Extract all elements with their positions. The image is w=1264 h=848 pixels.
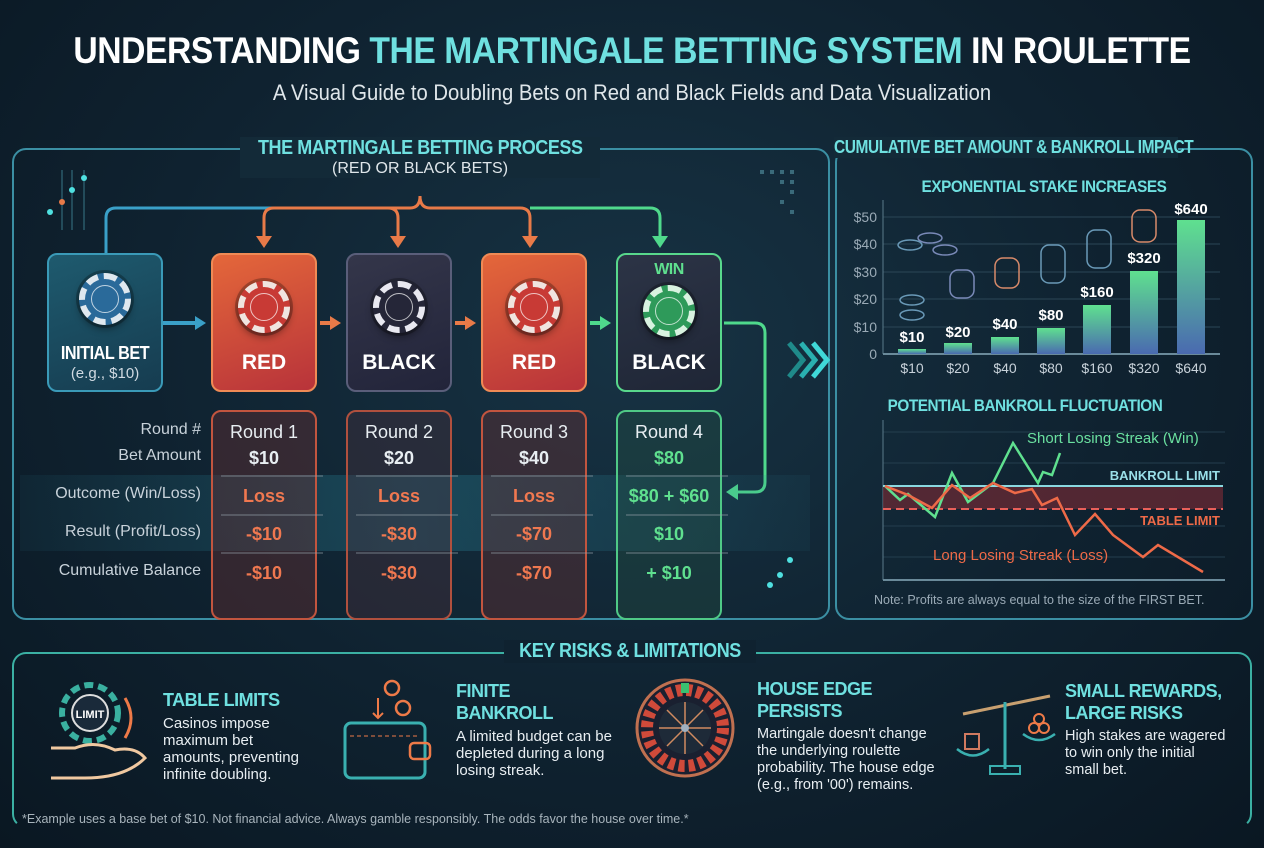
risk: house edge	[636, 678, 935, 793]
footer disclaimer: *Example uses a base bet of $10. Not financial advice. Always gamble responsibly. The odds favor the house over time.*	[22, 812, 689, 826]
table column: round 2: -$30	[381, 524, 417, 544]
bar chart: $20	[946, 360, 970, 376]
arrows: flow connectors	[47, 170, 794, 588]
table column: round 4: $10	[654, 524, 684, 544]
bar chart	[854, 200, 1220, 376]
table column: round 4: + $10	[646, 563, 692, 583]
risk: table limits	[51, 682, 299, 783]
table column: round 1	[211, 410, 317, 620]
panel: key risks	[12, 652, 1252, 828]
panel: cumulative bet & bankroll	[835, 148, 1253, 620]
line chart: TABLE LIMIT	[1140, 513, 1220, 528]
bar chart: $10	[899, 329, 925, 346]
card: black round 2	[346, 253, 452, 392]
risk: house edge: PERSISTS	[757, 701, 842, 721]
risk: house edge: Martingale doesn't change the underlying roulette probability. The house edge (e.g., from '00') remains.	[757, 726, 935, 793]
bar chart: $80	[1038, 307, 1064, 324]
risks heading: KEY RISKS & LIMITATIONS	[519, 640, 741, 662]
line chart: Short Losing Streak (Win)	[1027, 430, 1199, 447]
bar chart: $160	[1080, 284, 1114, 301]
bar chart heading: EXPONENTIAL STAKE INCREASES	[922, 177, 1166, 196]
table column: round 4: $80	[654, 448, 684, 468]
card: red round 1	[211, 253, 317, 392]
risk: finite bankroll	[344, 680, 612, 780]
table column: round 2: $20	[384, 448, 414, 468]
process heading: THE MARTINGALE BETTING PROCESS	[258, 137, 583, 159]
arrow: chevrons to right panel	[787, 341, 830, 379]
table column: round 1: Loss	[243, 486, 285, 506]
card: red round 3: RED	[512, 351, 556, 374]
risk: finite bankroll: A limited budget can be depleted during a long losing streak.	[456, 728, 612, 779]
highlight band rows	[20, 475, 810, 551]
icon: balance scale	[956, 694, 1056, 775]
bar chart: $320	[1128, 360, 1160, 376]
risk: small rewards: High stakes are wagered to win only the initial small bet.	[1065, 728, 1225, 778]
bar chart: $20	[945, 324, 971, 341]
table column: round 2: -$30	[381, 563, 417, 583]
risk: table limits: Casinos impose maximum bet amounts, preventing infinite doubling.	[163, 715, 299, 783]
risk: small rewards: SMALL REWARDS,	[1065, 681, 1222, 701]
card: initial bet: (e.g., $10)	[71, 365, 139, 382]
bar chart: $320	[1127, 250, 1161, 267]
table column: round 2: Loss	[378, 486, 420, 506]
table column: round 3	[481, 410, 587, 620]
table column: round 3: -$70	[516, 524, 552, 544]
right panel heading: CUMULATIVE BET AMOUNT & BANKROLL IMPACT	[834, 137, 1193, 157]
table column: round 4	[616, 410, 722, 620]
line chart	[882, 420, 1225, 581]
line chart: Long Losing Streak (Loss)	[933, 547, 1108, 564]
icon: wallet	[344, 680, 432, 780]
text: Result (Profit/Loss)	[65, 523, 201, 540]
icon: limit chip in hand: LIMIT	[76, 709, 105, 721]
table column: round 2	[346, 410, 452, 620]
icon: blue chip	[79, 273, 131, 325]
table column: round 1: -$10	[246, 563, 282, 583]
table column: round 3: -$70	[516, 563, 552, 583]
bar chart: $640	[1174, 201, 1208, 218]
table column: round 1: Round 1	[230, 422, 298, 442]
bar chart: $50	[854, 209, 877, 225]
card: win black round 4: WIN	[654, 261, 684, 278]
risk: finite bankroll: FINITE	[456, 681, 510, 701]
risk: house edge: HOUSE EDGE	[757, 679, 872, 699]
bar chart: $10	[900, 360, 924, 376]
process heading	[240, 137, 600, 178]
bar chart: $40	[992, 316, 1018, 333]
card: initial bet: INITIAL BET	[61, 343, 149, 363]
text: Outcome (Win/Loss)	[55, 485, 201, 502]
icon: limit chip in hand	[51, 682, 147, 780]
bar chart: $30	[854, 264, 877, 280]
process heading: (RED OR BLACK BETS)	[332, 160, 508, 177]
bar chart: 0	[869, 346, 877, 362]
line chart: BANKROLL LIMIT	[1110, 468, 1220, 483]
bar chart: $40	[854, 236, 877, 252]
icon: roulette wheel	[636, 678, 734, 778]
title: UNDERSTANDING THE MARTINGALE BETTING SYSTEM IN ROULETTE	[73, 30, 1191, 71]
table column: round 4: Round 4	[635, 422, 703, 442]
table column: round 3: $40	[519, 448, 549, 468]
risk: finite bankroll: BANKROLL	[456, 703, 553, 723]
table column: round 1: -$10	[246, 524, 282, 544]
text: Round #	[140, 421, 201, 438]
risk: table limits: TABLE LIMITS	[163, 690, 280, 710]
card: win black round 4	[616, 253, 722, 392]
card: win black round 4: BLACK	[632, 351, 706, 374]
row labels	[55, 421, 201, 579]
bar chart: $640	[1175, 360, 1207, 376]
table column: round 2: Round 2	[365, 422, 433, 442]
text: Cumulative Balance	[59, 562, 201, 579]
table column: round 3: Round 3	[500, 422, 568, 442]
bar chart: $80	[1039, 360, 1063, 376]
card: initial bet	[47, 253, 163, 392]
bar chart: $10	[854, 319, 877, 335]
table column: round 3: Loss	[513, 486, 555, 506]
card: black round 2: BLACK	[362, 351, 436, 374]
bar chart: $20	[854, 291, 877, 307]
table column: round 4: $80 + $60	[629, 486, 709, 506]
risk: small rewards	[956, 681, 1225, 778]
panel: martingale process	[12, 148, 830, 620]
table column: round 1: $10	[249, 448, 279, 468]
subtitle: A Visual Guide to Doubling Bets on Red and Black Fields and Data Visualization	[273, 80, 991, 105]
text: Bet Amount	[118, 447, 201, 464]
bar chart: $160	[1081, 360, 1113, 376]
line chart heading: POTENTIAL BANKROLL FLUCTUATION	[888, 396, 1162, 415]
risk: small rewards: LARGE RISKS	[1065, 703, 1183, 723]
card: red round 3	[481, 253, 587, 392]
note: Note: Profits are always equal to the size of the FIRST BET.	[874, 593, 1204, 607]
bar chart: $40	[993, 360, 1017, 376]
card: red round 1: RED	[242, 351, 286, 374]
